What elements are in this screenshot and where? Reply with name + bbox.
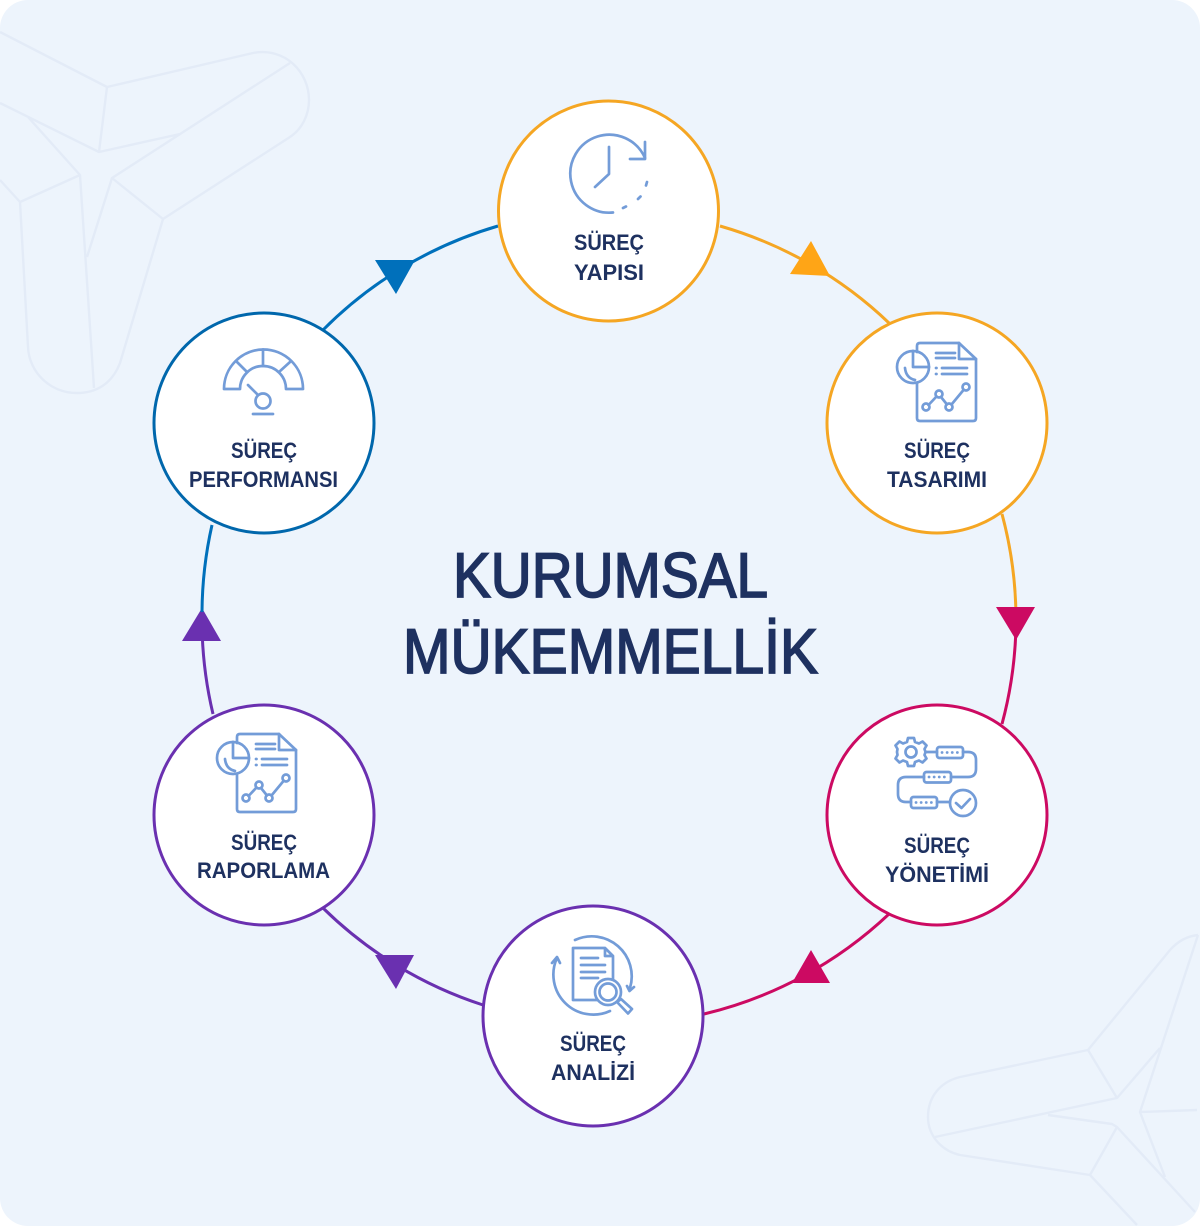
label: süreç tasarımı <box>887 438 987 492</box>
label: süreç yapısı: SÜREÇ <box>574 230 644 255</box>
ring arc: orange 1 <box>720 226 889 323</box>
ring arc: pink 2 <box>704 914 889 1014</box>
label: süreç performansı <box>189 438 338 492</box>
title <box>403 541 818 687</box>
label: süreç raporlama: SÜREÇ <box>231 830 297 855</box>
label: süreç raporlama <box>197 830 330 883</box>
arrow: pink up <box>792 950 830 983</box>
title: KURUMSAL <box>453 541 768 611</box>
arrow: purple up <box>182 608 221 641</box>
label: süreç yönetimi: SÜREÇ <box>904 833 970 858</box>
arrow: orange <box>790 241 830 276</box>
label: süreç tasarımı: SÜREÇ <box>904 438 970 463</box>
label: süreç raporlama: RAPORLAMA <box>197 858 330 883</box>
label: süreç analizi: ANALİZİ <box>551 1060 635 1085</box>
arrow: pink down <box>996 607 1035 640</box>
title: MÜKEMMELLİK <box>403 617 818 687</box>
ring arc: pink 1 <box>1002 625 1016 724</box>
icon: gauge <box>224 350 303 414</box>
label: süreç yönetimi: YÖNETİMİ <box>885 862 989 887</box>
label: süreç yönetimi <box>885 833 989 887</box>
label: süreç tasarımı: TASARIMI <box>887 467 987 492</box>
ring arc: blue 1 <box>202 525 212 612</box>
label: süreç yapısı: YAPISI <box>574 260 644 285</box>
node: süreç analizi <box>483 906 703 1126</box>
arrow: purple down <box>375 955 414 989</box>
node: süreç performansı <box>154 313 374 533</box>
label: süreç yapısı <box>574 230 644 285</box>
node: süreç yönetimi <box>827 705 1047 925</box>
arrow: blue <box>375 260 415 294</box>
icon: workflow <box>896 738 976 816</box>
icon: clock <box>570 135 647 213</box>
ring arc: purple 2 <box>202 625 213 714</box>
decorative propeller bottom right <box>928 935 1198 1225</box>
node: süreç yapısı <box>498 101 718 321</box>
icon: report document <box>897 343 976 421</box>
ring arc: purple 1 <box>323 908 483 1005</box>
label: süreç analizi <box>551 1031 635 1085</box>
ring arc: orange 2 <box>1002 514 1016 620</box>
node: süreç tasarımı <box>827 313 1047 533</box>
node: süreç raporlama <box>154 705 374 925</box>
ring arc: blue 2 <box>323 226 498 330</box>
icon: document analysis <box>552 936 634 1015</box>
label: süreç analizi: SÜREÇ <box>560 1031 626 1056</box>
decorative propeller top left <box>0 32 309 393</box>
label: süreç performansı: PERFORMANSI <box>189 467 338 492</box>
label: süreç performansı: SÜREÇ <box>231 438 297 463</box>
icon: report document <box>217 734 296 812</box>
